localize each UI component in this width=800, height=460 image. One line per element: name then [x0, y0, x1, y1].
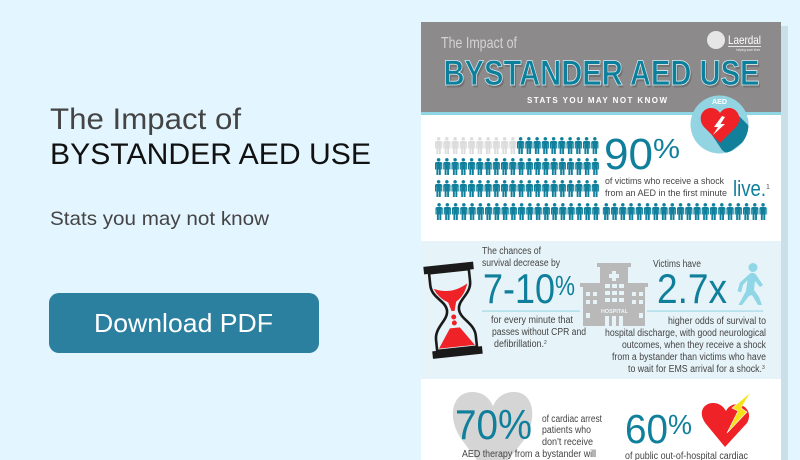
text: chances of survival: The chances of — [482, 246, 541, 257]
header title — [445, 60, 760, 88]
stat: 60%: 60 — [625, 406, 668, 452]
caption: 70%: AED therapy from a bystander will — [462, 449, 596, 460]
icon: hospital: HOSPITAL — [601, 309, 629, 315]
stat: 7-10% — [484, 274, 574, 304]
icon: AED badge: AED — [712, 97, 728, 106]
caption: 7-10% — [491, 316, 586, 347]
Laerdal logo — [707, 31, 761, 52]
stat: 90%: % — [653, 133, 680, 164]
caption: 2.7x: to wait for EMS arrival for a shock. — [628, 364, 762, 375]
stat: 60%: % — [668, 409, 692, 440]
infographic panel — [421, 22, 781, 460]
left title: The Impact of — [50, 103, 242, 136]
icon: walking person — [738, 263, 763, 305]
word: live: 1 — [766, 184, 770, 191]
divider lines — [482, 310, 580, 312]
section: 60 percent — [625, 392, 751, 460]
icon: grey broken heart — [453, 392, 532, 460]
stat: 7-10%: 7-10 — [483, 265, 555, 312]
stat: 90% — [606, 138, 679, 170]
section: 70 percent — [453, 392, 602, 460]
Laerdal logo: Laerdal — [728, 33, 761, 47]
left title: BYSTANDER AED USE — [50, 138, 371, 171]
header band — [421, 22, 781, 115]
caption: 70%: of cardiac arrest — [542, 414, 602, 425]
text: victims have: Victims have — [653, 259, 701, 270]
people chart — [435, 137, 768, 221]
header kicker: The Impact of — [441, 35, 517, 52]
caption: 2.7x: 3 — [762, 365, 765, 371]
stat: 2.7x: 2.7x — [657, 265, 727, 312]
stat: 7-10%: % — [555, 270, 575, 301]
caption: 90% — [605, 178, 727, 196]
stat: 70% — [457, 410, 531, 440]
icon: hourglass — [423, 262, 483, 359]
word: live: live. — [733, 176, 766, 201]
caption: 90%: from an AED in the first minute — [605, 188, 727, 199]
caption: 7-10%: passes without CPR and — [492, 327, 586, 338]
header subtitle: STATS YOU MAY NOT KNOW — [527, 96, 667, 105]
caption: 90%: of victims who receive a shock — [605, 176, 724, 187]
caption: 2.7x: hospital discharge, with good neurological — [605, 328, 766, 339]
panel shadow — [781, 26, 788, 460]
caption: 7-10%: defibrillation. — [494, 339, 544, 350]
caption: 7-10%: for every minute that — [491, 315, 573, 326]
caption: 2.7x: from a bystander than victims who have — [612, 352, 766, 363]
icon: AED badge — [690, 96, 749, 154]
caption: 2.7x — [605, 316, 767, 375]
left title — [50, 103, 371, 171]
caption: 2.7x: outcomes, when they receive a shock — [622, 340, 767, 351]
stat: 70%: % — [498, 401, 532, 448]
download button — [49, 293, 319, 353]
download button: Download PDF — [94, 308, 273, 338]
stat: 70%: 70 — [455, 401, 498, 448]
caption: 70%: patients who — [542, 425, 591, 436]
icon: red heart with lightning — [702, 392, 751, 447]
icon: hospital — [580, 263, 648, 326]
stat: 90%: 90 — [604, 130, 653, 179]
text: chances of survival: survival decrease by — [482, 258, 560, 269]
Laerdal logo: helping save lives — [736, 48, 760, 52]
caption: 70% — [462, 414, 602, 460]
section: 90 percent — [435, 130, 770, 221]
text: chances of survival — [482, 246, 560, 269]
caption: 2.7x: higher odds of survival to — [668, 316, 766, 327]
section: survival odds — [421, 241, 781, 379]
stat: 60% — [626, 414, 691, 444]
caption: 70%: don't receive — [542, 437, 593, 448]
caption: 7-10%: 2 — [544, 340, 547, 346]
left subtitle: Stats you may not know — [50, 208, 270, 230]
word: live — [734, 180, 770, 196]
